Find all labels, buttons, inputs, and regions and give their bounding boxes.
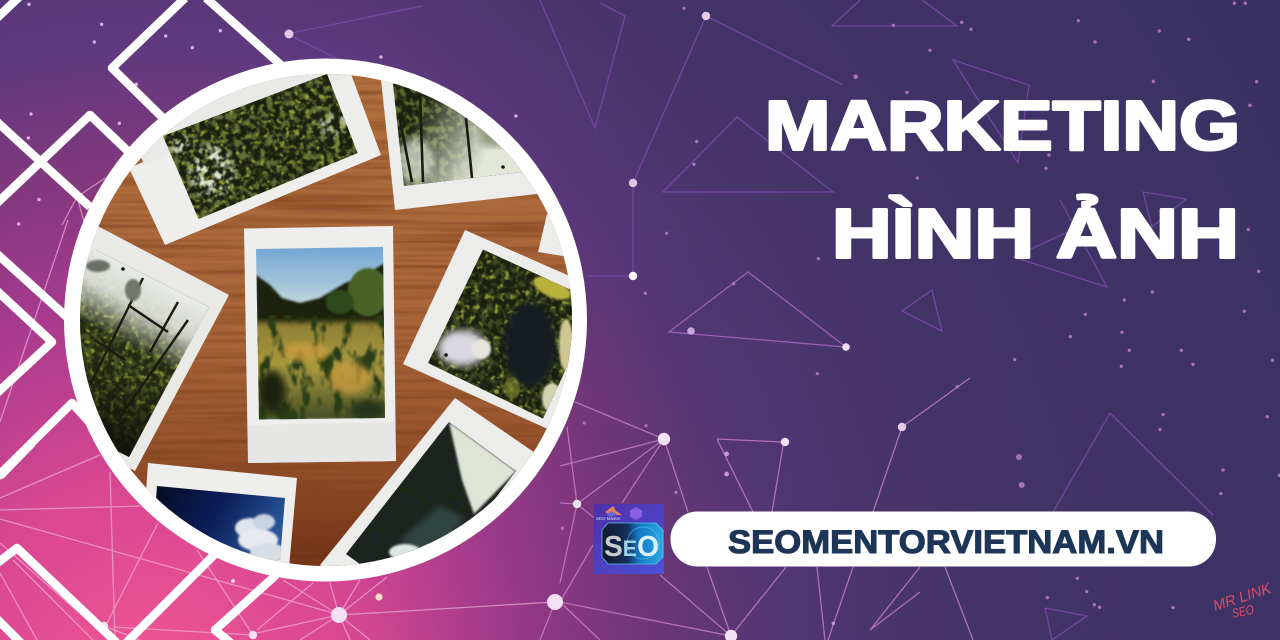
circular photo panel (64, 58, 587, 582)
photo scene clipped to circle (80, 74, 572, 566)
wooden table (70, 70, 580, 570)
polaroid: left (80, 226, 229, 471)
SEO logo: SEO (604, 531, 659, 563)
polaroid: top right (381, 80, 537, 210)
title line 2 (832, 194, 1239, 272)
title line 2: HÌNH (832, 194, 1034, 272)
white circle ring (64, 58, 587, 582)
polaroid: centre (244, 226, 396, 463)
network lines: lower left and bottom (0, 178, 555, 640)
polaroid: top left (130, 74, 381, 245)
polaroid: bottom centre (146, 463, 297, 564)
title line 1: MARKETING (765, 86, 1240, 164)
polaroid: bottom right (320, 398, 534, 566)
outline triangles and top network (287, 0, 1213, 640)
polaroid: small right edge (538, 214, 564, 256)
title line 2: ẢNH (1056, 194, 1239, 272)
signature: MR LINK SEO: SEO (1231, 602, 1255, 621)
title (765, 86, 1240, 272)
website address: SEOMENTORVIETNAM.VN (728, 524, 1164, 560)
polaroid: right (403, 230, 572, 428)
network nodes (74, 12, 906, 640)
signature: MR LINK SEO: MR LINK (1211, 580, 1274, 615)
pill background (670, 512, 1216, 566)
SEO logo (594, 504, 664, 574)
website pill (670, 512, 1216, 566)
network lines: centre cluster (540, 378, 973, 640)
logo mark: SEO Master (596, 516, 621, 521)
white geometric outlines (0, 0, 282, 640)
